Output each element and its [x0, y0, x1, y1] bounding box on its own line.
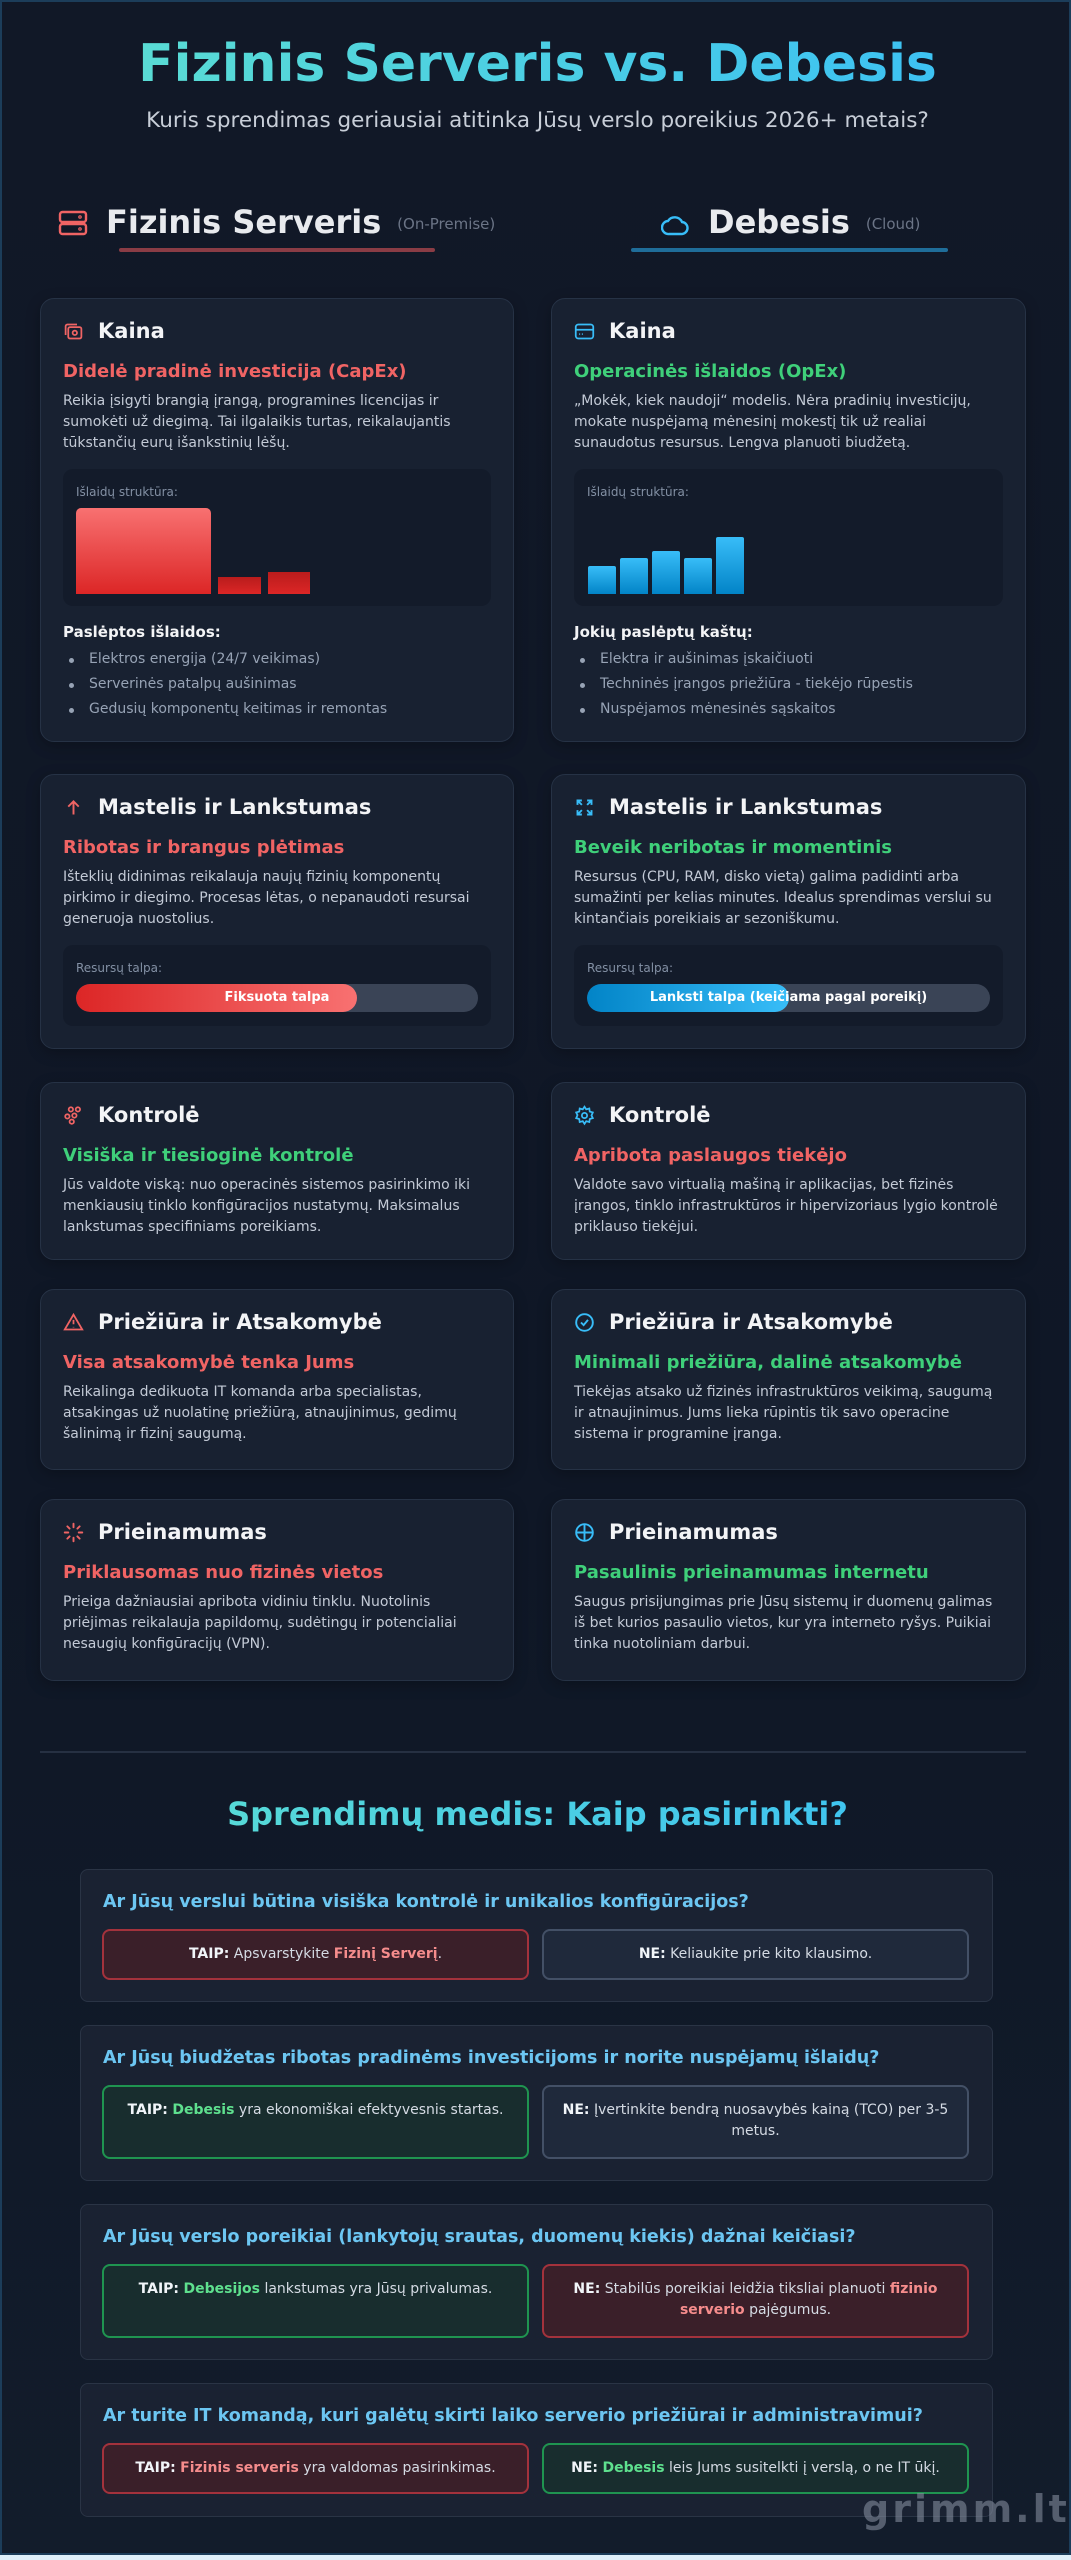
answer no — [542, 1929, 969, 1980]
panel: cloud cost: Elektra ir aušinimas įskaičiuoti — [600, 651, 813, 667]
capacity bar — [574, 945, 1003, 1026]
icon: server — [58, 210, 88, 236]
panel: physical scaling — [40, 774, 514, 1049]
answer yes — [102, 1929, 529, 1980]
bar chart: Išlaidų struktūra: — [76, 485, 178, 499]
panel: cloud access — [551, 1499, 1026, 1681]
text: Reikia įsigyti brangią įrangą, programines licencijas ir — [63, 393, 438, 409]
text: įrangos, tinklo infrastruktūros ir hipervizoriaus lygio kontrolė — [574, 1198, 998, 1214]
capacity bar: Lanksti talpa (keičiama pagal poreikį) — [650, 990, 927, 1005]
question 1: Ar Jūsų verslui būtina visiška kontrolė ir unikalios konfigūracijos? — [103, 1892, 749, 1912]
answer no: NE: Stabilūs poreikiai leidžia tiksliai planuoti fizinio serverio pajėgumus. — [573, 2281, 938, 2318]
question 2: Ar Jūsų biudžetas ribotas pradinėms investicijoms ir norite nuspėjamų išlaidų? — [103, 2048, 879, 2068]
question 2 — [80, 2025, 993, 2181]
subheading: Didelė pradinė investicija (CapEx) — [63, 361, 407, 382]
subtitle: Kuris sprendimas geriausiai atitinka Jūsų verslo poreikius 2026+ metais? — [146, 108, 929, 133]
text: Resursus (CPU, RAM, disko vietą) galima padidinti arba — [574, 869, 959, 885]
text: tūkstančių eurų išankstinių lėšų. — [63, 435, 290, 451]
question 3: Ar Jūsų verslo poreikiai (lankytojų srautas, duomenų kiekis) dažnai keičiasi? — [103, 2227, 856, 2247]
subheading: Apribota paslaugos tiekėjo — [574, 1145, 847, 1166]
heading: Kaina — [98, 319, 165, 343]
subheading: Visa atsakomybė tenka Jums — [63, 1352, 354, 1373]
panel: physical control — [40, 1082, 514, 1260]
text: Tiekėjas atsako už fizinės infrastruktūros veikimą, saugumą — [574, 1384, 992, 1400]
text — [62, 1177, 470, 1235]
panel: physical cost: Serverinės patalpų aušinimas — [89, 676, 297, 692]
text: sumokėti už diegimą. Tai ilgalaikis turtas, reikalaujantis — [63, 414, 451, 430]
title: Fizinis Serveris vs. Debesis — [138, 34, 937, 94]
heading: Kontrolė — [609, 1103, 711, 1127]
panel: cloud scaling — [551, 774, 1026, 1049]
text: nesaugių konfigūracijų (VPN). — [63, 1636, 270, 1652]
heading — [64, 319, 165, 343]
text — [574, 869, 992, 927]
panel: cloud maintenance — [551, 1289, 1026, 1470]
column header: physical server: Fizinis Serveris (On-Premise) — [106, 203, 495, 241]
heading: Kontrolė — [98, 1103, 200, 1127]
text — [574, 1177, 998, 1235]
answer yes: TAIP: Debesijos lankstumas yra Jūsų privalumas. — [139, 2281, 492, 2297]
question 4 — [80, 2383, 993, 2517]
text — [63, 869, 470, 927]
text: priėjimas reikalauja papildomų, sudėtingų ir potencialiai — [63, 1615, 457, 1631]
panel: cloud cost: Nuspėjamos mėnesinės sąskaitos — [600, 701, 836, 717]
heading: Mastelis ir Lankstumas — [98, 795, 371, 819]
subheading: Beveik neribotas ir momentinis — [574, 837, 892, 858]
text: sumažinti per kelias minutes. Idealus sprendimas verslui su — [574, 890, 992, 906]
text: kintančiais poreikiais ar sezoniškumu. — [574, 911, 839, 927]
heading: Priežiūra ir Atsakomybė — [609, 1310, 893, 1334]
text: pirkimo ir diegimo. Procesas lėtas, o nepanaudoti resursai — [63, 890, 470, 906]
bar chart: Išlaidų struktūra: — [587, 485, 689, 499]
question 1 — [80, 1869, 993, 2002]
text — [574, 1384, 992, 1442]
answer no: NE: Įvertinkite bendrą nuosavybės kainą (TCO) per 3-5 metus. — [563, 2102, 948, 2139]
text: sunaudotus resursus. Lengva planuoti biudžetą. — [574, 435, 910, 451]
answer no — [542, 2264, 969, 2338]
answer no — [542, 2443, 969, 2494]
heading: Prieinamumas — [98, 1520, 267, 1544]
answer yes — [102, 2443, 529, 2494]
text — [63, 1594, 457, 1652]
text: Jūs valdote viską: nuo operacinės sistemos pasirinkimo iki — [63, 1177, 470, 1193]
subheading: Pasaulinis prieinamumas internetu — [574, 1562, 929, 1583]
subheading: Operacinės išlaidos (OpEx) — [574, 361, 846, 382]
panel: cloud cost — [551, 298, 1026, 742]
text: atsakingas už nuolatinę priežiūrą, atnaujinimus, gedimų — [63, 1405, 457, 1421]
text: menkiausių tinklo konfigūracijos nustatymų. Maksimalus — [63, 1198, 460, 1214]
answer yes: TAIP: Apsvarstykite Fizinį Serverį. — [189, 1946, 442, 1962]
hidden costs: Paslėptos išlaidos: — [63, 623, 221, 641]
subheading: Priklausomas nuo fizinės vietos — [63, 1562, 383, 1583]
decision tree title: Sprendimų medis: Kaip pasirinkti? — [227, 1795, 848, 1833]
text: tinka nuotoliniam darbui. — [574, 1636, 750, 1652]
text: generuoja nuostolius. — [63, 911, 214, 927]
text: ir atnaujinimus. Jums lieka rūpintis tik savo operacine — [574, 1405, 949, 1421]
heading: Priežiūra ir Atsakomybė — [98, 1310, 382, 1334]
answer no: NE: Debesis leis Jums susitelkti į verslą, o ne IT ūkį. — [571, 2460, 940, 2476]
capacity bar: Fiksuota talpa — [225, 990, 329, 1005]
answer yes: TAIP: Debesis yra ekonomiškai efektyvesnis startas. — [128, 2102, 503, 2118]
panel: physical cost: Gedusių komponentų keitimas ir remontas — [89, 701, 387, 717]
heading — [574, 319, 676, 343]
text: sistema ir programine įranga. — [574, 1426, 782, 1442]
subheading: Visiška ir tiesioginė kontrolė — [63, 1145, 354, 1166]
text — [574, 1594, 992, 1652]
capacity bar — [63, 945, 491, 1026]
text: Išteklių didinimas reikalauja naujų fizinių komponentų — [63, 869, 440, 885]
subheading: Ribotas ir brangus plėtimas — [63, 837, 344, 858]
text: Saugus prisijungimas prie Jūsų sistemų ir duomenų galimas — [574, 1594, 992, 1610]
panel: physical cost: Elektros energija (24/7 veikimas) — [89, 651, 320, 667]
text: šalinimą ir fizinį saugumą. — [63, 1426, 247, 1442]
answer yes: TAIP: Fizinis serveris yra valdomas pasirinkimas. — [135, 2460, 496, 2476]
answer no: NE: Keliaukite prie kito klausimo. — [639, 1946, 872, 1962]
text: Valdote savo virtualią mašiną ir aplikacijas, bet fizinės — [574, 1177, 953, 1193]
panel: physical access — [40, 1499, 514, 1681]
answer yes — [102, 2264, 529, 2338]
text: Prieiga dažniausiai apribota vidiniu tinklu. Nuotolinis — [63, 1594, 430, 1610]
watermark: grimm.lt — [862, 2487, 1070, 2531]
text — [63, 393, 451, 451]
panel: physical maintenance — [40, 1289, 514, 1470]
answer no — [542, 2085, 969, 2159]
icon: cloud — [661, 216, 689, 236]
text: lankstumas specifiniams poreikiams. — [63, 1219, 321, 1235]
bar chart — [574, 469, 1003, 606]
heading: Kaina — [609, 319, 676, 343]
text: Reikalinga dedikuota IT komanda arba specialistas, — [63, 1384, 422, 1400]
heading: Mastelis ir Lankstumas — [609, 795, 882, 819]
question 3 — [80, 2204, 993, 2360]
text: „Mokėk, kiek naudoji“ modelis. Nėra pradinių investicijų, — [574, 393, 971, 409]
bar chart — [63, 469, 491, 606]
capacity bar: Resursų talpa: — [587, 961, 673, 975]
hidden costs: Jokių paslėptų kaštų: — [574, 623, 753, 641]
text: mokate nuspėjamą mėnesinį mokestį tik už realiai — [574, 414, 926, 430]
panel: physical cost — [40, 298, 514, 742]
text — [574, 393, 971, 451]
subheading: Minimali priežiūra, dalinė atsakomybė — [574, 1352, 962, 1373]
text: priklauso tiekėjui. — [574, 1219, 698, 1235]
panel: cloud cost: Techninės įrangos priežiūra - tiekėjo rūpestis — [600, 676, 913, 692]
text — [63, 1384, 457, 1442]
column header: cloud: Debesis (Cloud) — [708, 203, 920, 241]
capacity bar: Resursų talpa: — [76, 961, 162, 975]
question 4: Ar turite IT komandą, kuri galėtų skirti laiko serverio priežiūrai ir administravimui? — [103, 2406, 923, 2426]
panel: cloud control — [551, 1082, 1026, 1260]
decision tree title — [2, 1794, 1071, 1834]
text: iš bet kurios pasaulio vietos, kur yra interneto ryšys. Puikiai — [574, 1615, 991, 1631]
answer yes — [102, 2085, 529, 2159]
heading: Prieinamumas — [609, 1520, 778, 1544]
